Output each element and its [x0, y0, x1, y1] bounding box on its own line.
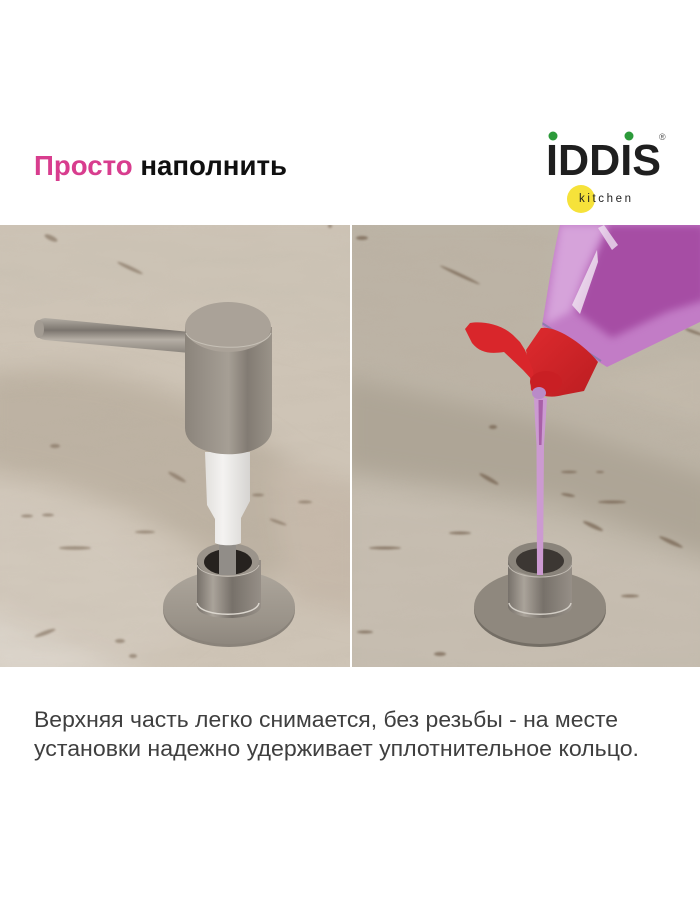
collar — [508, 542, 572, 618]
flip lid — [465, 322, 534, 382]
red cap — [465, 322, 598, 399]
text line 2: установки надежно удерживает уплотнительное кольцо. — [34, 736, 639, 761]
logo: IDDIS kitchen — [546, 132, 666, 213]
collar — [197, 543, 261, 618]
body text — [34, 707, 639, 761]
bottle — [535, 220, 700, 370]
panel: dispenser with top removed — [0, 224, 370, 680]
icon: yellow circle — [567, 185, 595, 213]
stone speckles — [356, 236, 700, 656]
registered mark: ® — [659, 132, 666, 142]
title: Просто наполнить — [34, 150, 287, 181]
inner rod — [219, 544, 236, 575]
metal flange — [474, 570, 606, 647]
logo wordmark: IDDIS — [546, 136, 661, 185]
stone background — [352, 225, 700, 667]
stone speckles — [21, 224, 332, 658]
infographic canvas — [0, 132, 700, 760]
dispenser head — [185, 302, 272, 454]
soap stream — [534, 398, 547, 575]
spout — [34, 318, 190, 353]
icon: green dots — [548, 132, 634, 140]
text line 1: Верхняя часть легко снимается, без резьбы - на месте — [34, 707, 618, 732]
logo subline: kitchen — [579, 193, 631, 205]
white tube — [205, 452, 250, 545]
panel: filling with soap — [340, 220, 700, 680]
stone background — [0, 225, 350, 667]
metal flange — [163, 570, 295, 647]
